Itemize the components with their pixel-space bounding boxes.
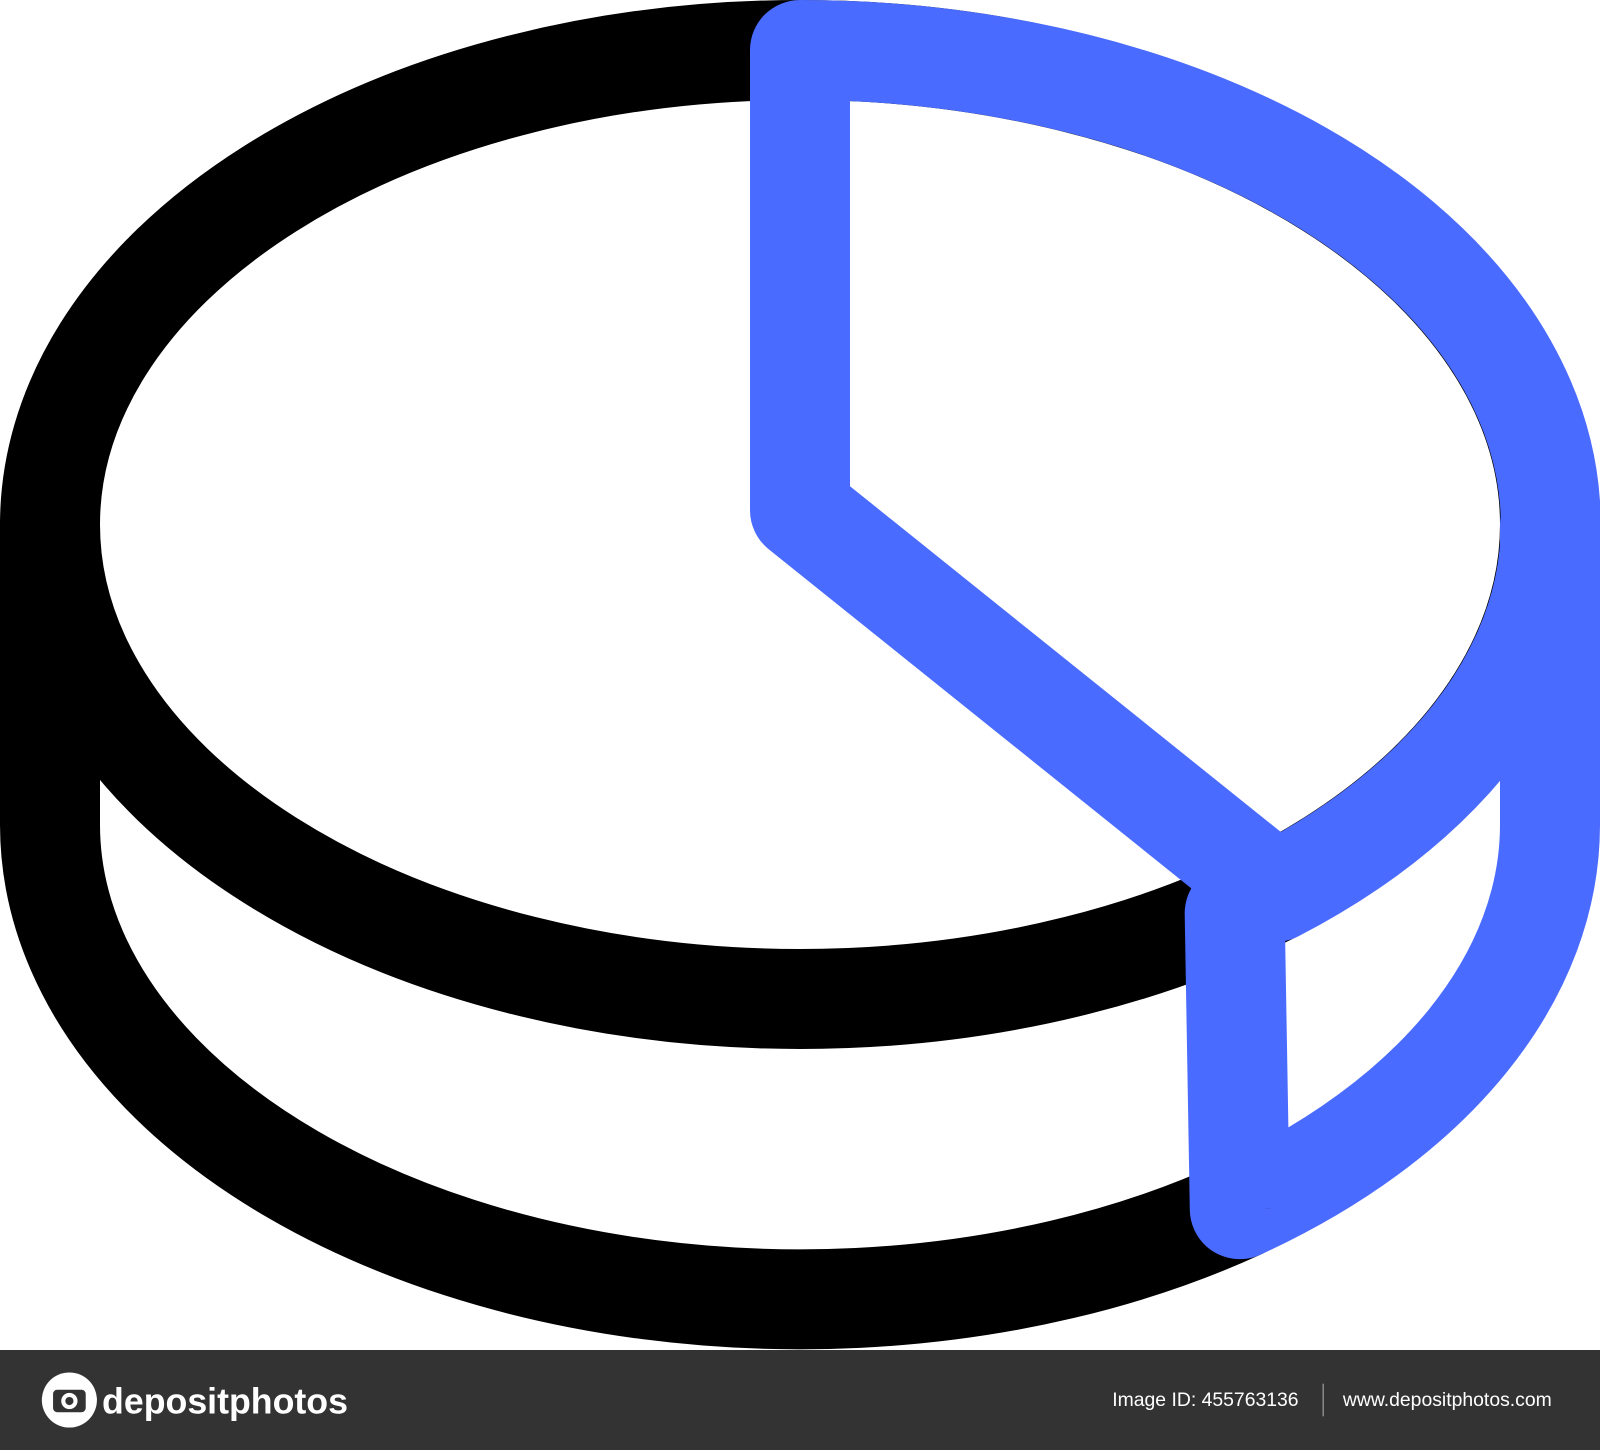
image id: Image ID: 455763136 bbox=[1112, 1389, 1299, 1411]
website: www.depositphotos.com bbox=[1342, 1389, 1552, 1411]
logo text: depositphotos bbox=[102, 1381, 348, 1421]
blue pie slice bbox=[800, 50, 1551, 1209]
logo icon bbox=[42, 1372, 97, 1428]
footer bar bbox=[0, 1350, 1600, 1450]
